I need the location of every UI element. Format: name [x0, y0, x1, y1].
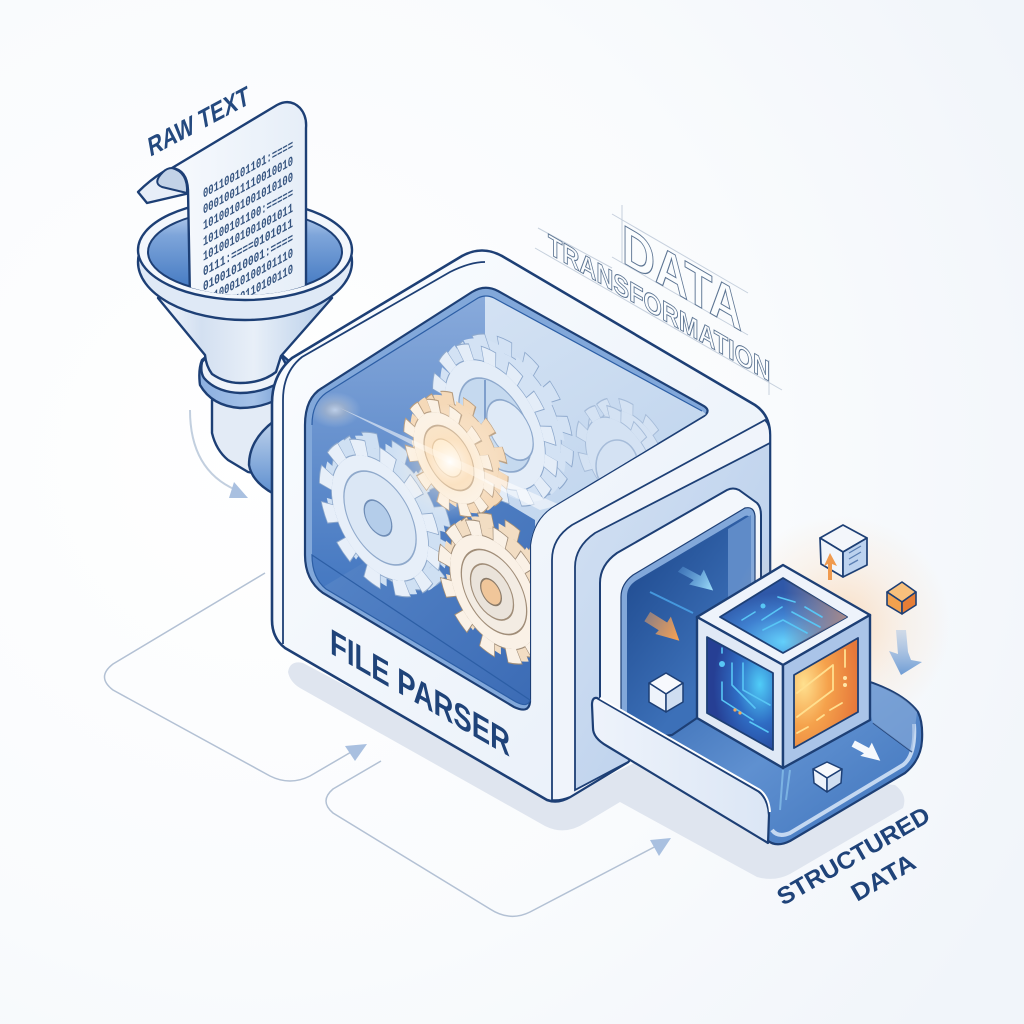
gear back large: [439, 318, 567, 522]
gear back small: [576, 398, 660, 480]
funnel elbow opening: [249, 421, 274, 494]
left window: [707, 637, 773, 750]
cube orange: [887, 582, 916, 614]
funnel cone: [158, 298, 332, 383]
cube light: floor reflection: [780, 770, 790, 810]
binary text: 01001010001:====: [203, 231, 293, 296]
conveyor tray: [592, 640, 922, 844]
binary text: 10100101100:=====: [203, 186, 293, 251]
gear chamber: [312, 296, 706, 704]
arrow: orange up: [824, 553, 837, 580]
binary text: 0111:====0101011: [203, 216, 293, 281]
raw text label: RAW TEXT: [146, 80, 251, 163]
funnel inner: [148, 210, 342, 294]
cube small tunnel: [649, 673, 683, 712]
right face upper band: [552, 420, 770, 800]
file parser machine: [272, 250, 770, 801]
tray lip: [592, 698, 769, 843]
floor: [324, 501, 535, 704]
cube small tray: [813, 762, 842, 792]
chamber inner stroke: [312, 296, 702, 705]
flow arrow: lower-left loop: [104, 573, 367, 781]
machine left inner line: [283, 262, 485, 644]
structured data label: DATA: [846, 849, 921, 907]
file parser label: FILE PARSER: [330, 622, 510, 765]
arrow: blue down: [889, 630, 922, 675]
arrow: tray white: [850, 735, 886, 765]
back wall: [485, 296, 706, 540]
tunnel rim: [621, 508, 755, 790]
right window: [794, 638, 858, 748]
gear white left: [326, 416, 446, 612]
binary text: 10100101001010100: [203, 170, 293, 235]
tray upturned end: [860, 680, 917, 752]
funnel: [138, 200, 352, 494]
cube top: [697, 565, 870, 665]
tray floor: [650, 640, 922, 844]
ground shadow: [288, 662, 904, 879]
document: raw text: [136, 100, 308, 295]
funnel lower pipe: [212, 395, 290, 480]
right face: [575, 443, 770, 790]
transformation heading: TRANSFORMATION: [548, 229, 770, 388]
gear orange bottom: [438, 512, 530, 665]
tunnel interior: [627, 516, 751, 790]
binary text: 10100101001001011: [203, 201, 293, 266]
guide lines: [535, 205, 782, 395]
paper curl: [157, 168, 187, 193]
cube right: [783, 615, 870, 768]
cube document: [820, 525, 867, 577]
gear orange top: [409, 380, 503, 528]
binary text: 00100010100101110: [203, 246, 293, 311]
binary text: 01001110110100110: [203, 262, 293, 327]
arrow: tunnel orange: [642, 606, 688, 647]
data transformation label: [535, 205, 782, 395]
data heading: DATA: [622, 212, 742, 344]
flow arrow: bottom loop: [326, 761, 671, 916]
funnel band: [199, 355, 290, 408]
funnel lower lip: [138, 204, 352, 320]
glare: [309, 392, 560, 520]
tunnel frame: [600, 488, 761, 792]
top window: [720, 578, 847, 653]
arrow: tunnel blue: [675, 559, 720, 596]
cube left: [697, 617, 783, 768]
gear window frame: [305, 288, 708, 710]
machine body: [272, 250, 770, 801]
structured data label: STRUCTURED: [772, 802, 935, 911]
tunnel light beam: [650, 592, 693, 613]
tray rim: [772, 724, 914, 835]
flow arrow: funnel curve: [190, 410, 248, 498]
tray lip highlight: [600, 698, 770, 812]
tunnel side wall: [728, 515, 751, 650]
paper tail: [138, 172, 190, 203]
left wall: [312, 296, 485, 586]
binary text: [204, 142, 293, 295]
output tunnel: [600, 488, 761, 792]
funnel collar: [201, 355, 288, 393]
funnel rim: [138, 200, 352, 300]
binary text: 001100101101:====: [203, 138, 293, 203]
paper sheet: [172, 102, 306, 300]
binary text: 00010011110010010: [203, 154, 293, 219]
main data cube: [697, 565, 870, 768]
glow behind cube: [730, 515, 950, 735]
tray fold: [873, 723, 912, 752]
